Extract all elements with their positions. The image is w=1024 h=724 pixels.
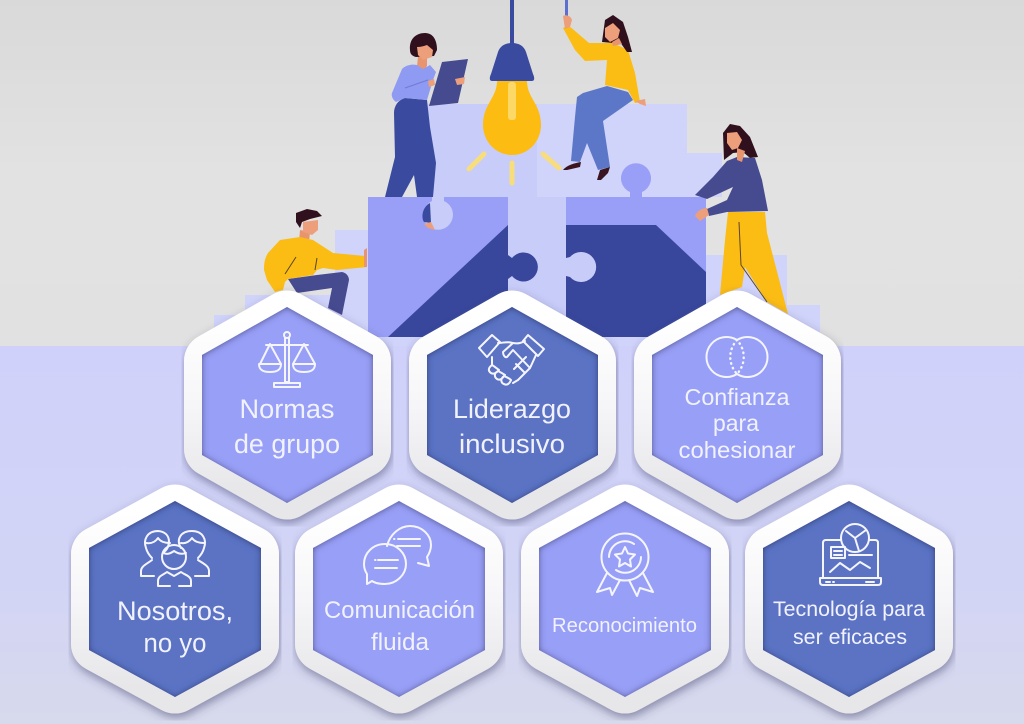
icon: speech bubbles	[364, 526, 431, 584]
light central column	[428, 104, 566, 337]
label: Confianza	[684, 384, 790, 410]
hexagon fill	[427, 307, 598, 503]
puzzle piece: right	[566, 163, 706, 337]
person: crouching man in yellow	[264, 209, 367, 315]
label line three: cohesionar	[678, 437, 796, 463]
icon: hanging light bulb	[469, 0, 559, 183]
puzzle piece: left	[368, 197, 538, 337]
hexagon frame	[773, 512, 925, 686]
person: standing woman pushing puzzle	[695, 124, 788, 314]
light stepped blocks behind puzzle	[214, 104, 820, 346]
label: Tecnología para	[773, 598, 925, 621]
hexagon fill	[539, 501, 711, 697]
icon: balance scales	[259, 332, 315, 387]
icon: laptop with charts	[820, 524, 881, 585]
hexagon fill	[89, 501, 261, 697]
label line two: ser eficaces	[793, 626, 907, 649]
icon: award ribbon	[597, 534, 653, 596]
panel: Liderazgo inclusivo	[427, 307, 598, 503]
panel: Nosotros, no yo	[89, 501, 261, 697]
panel: Reconocimiento	[539, 501, 711, 697]
person: woman with clipboard	[385, 33, 468, 197]
label: Reconocimiento	[552, 615, 697, 637]
hexagon frame	[212, 318, 363, 492]
hexagon fill	[763, 501, 935, 697]
background: grey upper area	[0, 0, 1024, 346]
panel: Tecnología para ser eficaces	[763, 501, 935, 697]
illustration: puzzle blocks, lamp and people	[214, 0, 820, 346]
label: Comunicación	[324, 597, 475, 624]
icon: overlapping circles	[706, 337, 768, 377]
label: Liderazgo	[453, 394, 571, 424]
label line two: no yo	[144, 628, 206, 658]
background: lilac lower area	[0, 346, 1024, 724]
hexagon fill	[313, 501, 485, 697]
panel: Normas de grupo	[202, 307, 373, 503]
hexagon fill	[202, 307, 373, 503]
person: sitting woman in yellow	[563, 0, 646, 180]
icon: group of people	[141, 531, 209, 586]
hexagon frame	[437, 318, 588, 492]
label line two: fluida	[371, 629, 430, 656]
label line two: de grupo	[234, 429, 340, 459]
panel: Confianza para cohesionar	[652, 307, 823, 503]
panel: Comunicación fluida	[313, 501, 485, 697]
label line two: inclusivo	[459, 429, 565, 459]
label: Nosotros,	[117, 596, 233, 626]
hexagon frame	[99, 512, 251, 686]
hexagon frame	[549, 512, 701, 686]
hexagon frame	[323, 512, 475, 686]
label: Normas	[240, 394, 334, 424]
hexagon fill	[652, 307, 823, 503]
hexagon frame	[662, 318, 813, 492]
label line two: para	[713, 410, 759, 436]
icon: handshake	[479, 335, 544, 385]
